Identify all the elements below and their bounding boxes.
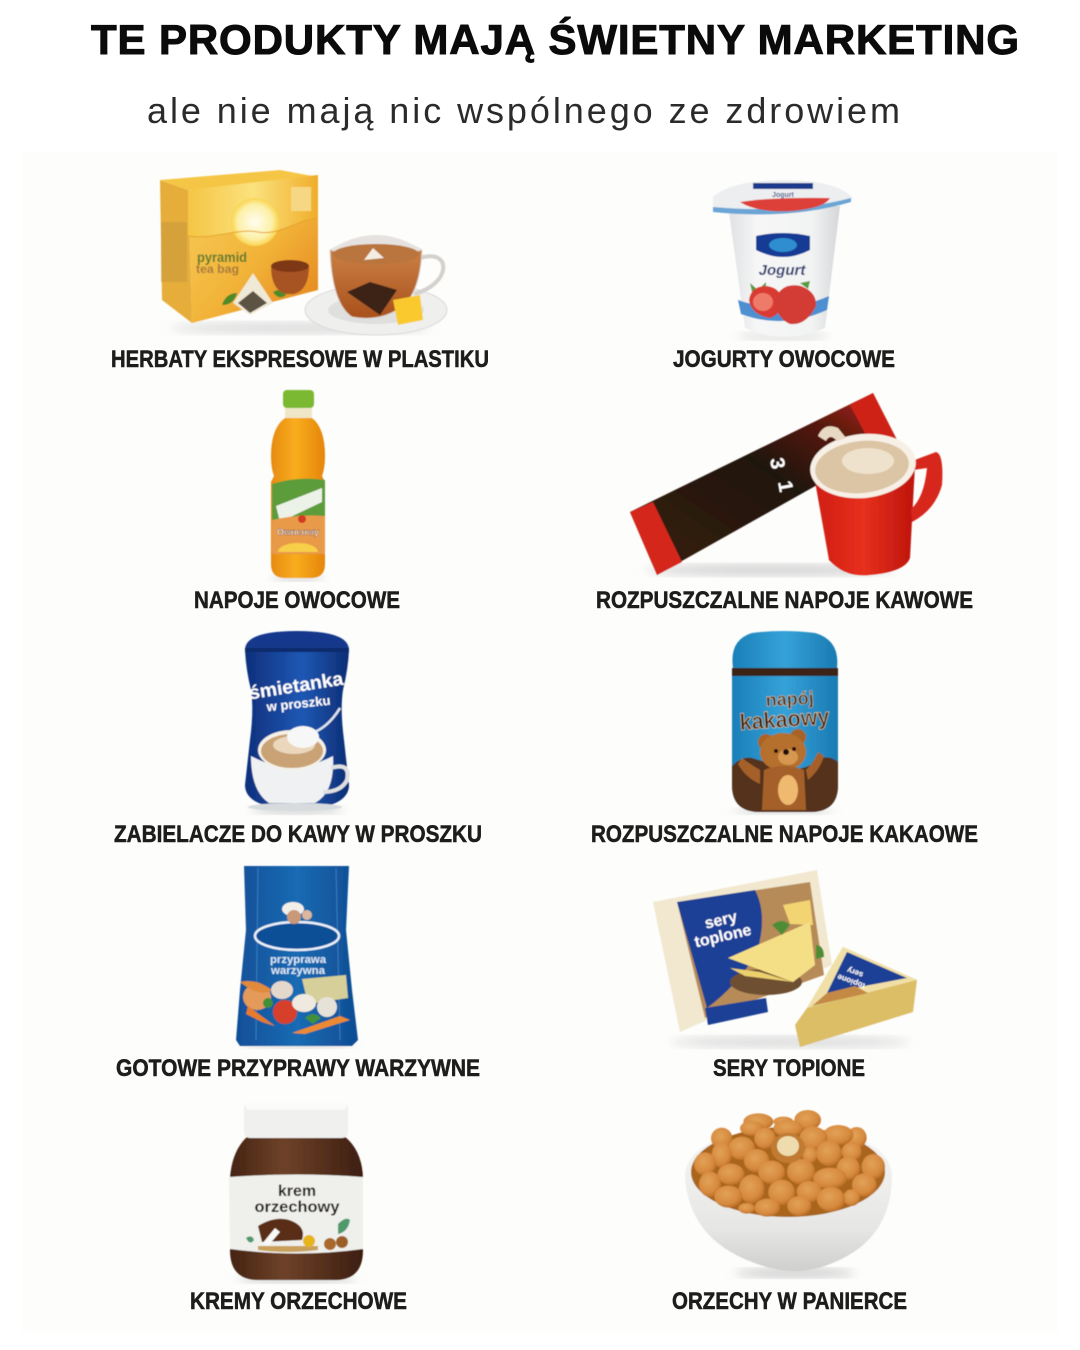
product: hazelnut spread jar <box>229 1103 363 1283</box>
product: seasoning pouch <box>236 866 358 1048</box>
product: processed cheese: toplone <box>693 922 753 951</box>
product: cocoa jar: napój <box>765 688 814 710</box>
product: coffee creamer can: śmietanka <box>248 669 345 704</box>
label: coated nuts: ORZECHY W PANIERCE <box>672 1288 907 1315</box>
subtitle: ale nie mają nic wspólnego ze zdrowiem <box>147 90 900 131</box>
label: seasoning mixes: GOTOWE PRZYPRAWY WARZYWNE <box>116 1055 480 1082</box>
label: yogurt: JOGURTY OWOCOWE <box>673 346 895 373</box>
label: instant cocoa drinks: ROZPUSZCZALNE NAPOJE KAKAOWE <box>591 821 978 848</box>
product: hazelnut spread jar: orzechowy <box>254 1199 340 1216</box>
label: hazelnut spreads: KREMY ORZECHOWE <box>190 1288 407 1315</box>
label: processed cheese: SERY TOPIONE <box>713 1055 865 1082</box>
product: processed cheese: sery <box>703 909 739 933</box>
product: yogurt cup: Jogurt <box>772 192 795 199</box>
product: juice bottle <box>271 390 325 581</box>
product: cocoa jar <box>732 631 838 814</box>
product: instant coffee stick and mug <box>630 393 942 576</box>
product: seasoning pouch: przyprawa <box>270 954 327 966</box>
product: yogurt cup: Jogurt <box>759 262 806 279</box>
product: tea box and cup <box>160 170 447 335</box>
product: tea box and cup: pyramid <box>197 249 247 265</box>
product: processed cheese: sery <box>845 965 864 979</box>
product: coffee creamer can: w proszku <box>265 693 331 714</box>
product: cocoa jar: kakaowy <box>739 703 830 735</box>
product: seasoning pouch: warzywna <box>270 965 326 977</box>
product: yogurt cup <box>713 180 852 340</box>
product: coffee creamer can <box>245 631 349 814</box>
product: instant coffee stick and mug: 1 <box>773 479 797 494</box>
product: processed cheese <box>653 870 917 1048</box>
product: coated peanuts bowl <box>685 1110 892 1278</box>
label: coffee creamers: ZABIELACZE DO KAWY W PROSZKU <box>114 821 482 848</box>
label: instant coffee drinks: ROZPUSZCZALNE NAPOJE KAWOWE <box>596 587 973 614</box>
product: hazelnut spread jar: krem <box>278 1183 316 1200</box>
product: juice bottle: Owocowy <box>277 527 319 537</box>
product: instant coffee stick and mug: 3 <box>765 456 789 471</box>
label: fruit drinks: NAPOJE OWOCOWE <box>194 587 400 614</box>
product: tea box and cup: tea bag <box>196 262 239 276</box>
product: processed cheese: topione <box>836 972 866 991</box>
title: TE PRODUKTY MAJĄ ŚWIETNY MARKETING <box>91 15 1019 63</box>
label: tea: HERBATY EKSPRESOWE W PLASTIKU <box>111 346 489 373</box>
